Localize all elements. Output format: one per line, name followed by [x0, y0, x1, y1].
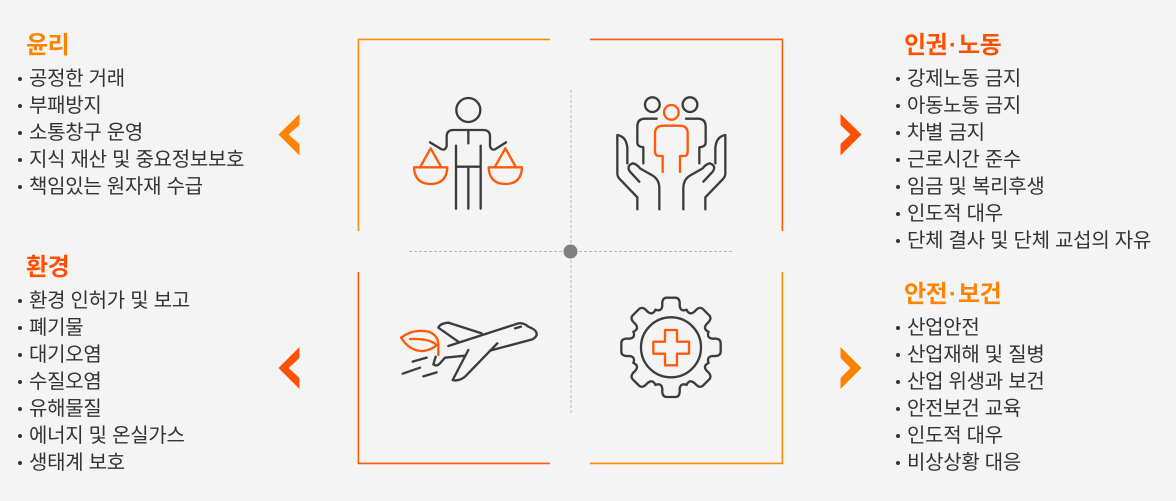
- list: environment: 수질오염: [29, 371, 102, 393]
- list: environment: 폐기물: [29, 317, 83, 339]
- heading: human rights and labor: 인권·노동: [904, 32, 1001, 59]
- heading: ethics: 윤리: [26, 32, 69, 59]
- frame corners: [358, 39, 782, 463]
- list: environment: 생태계 보호: [29, 452, 125, 474]
- list: human rights and labor: 근로시간 준수: [907, 149, 1021, 171]
- list: human rights and labor: 단체 결사 및 단체 교섭의 자유: [907, 230, 1151, 252]
- list: ethics: [18, 68, 244, 198]
- arrow: ethics: [278, 114, 300, 156]
- list: safety and health: 인도적 대우: [907, 425, 1003, 447]
- list: human rights and labor: 아동노동 금지: [907, 95, 1021, 117]
- list: ethics: 부패방지: [29, 95, 102, 117]
- arrow: environment: [278, 347, 300, 389]
- center crosshair: [409, 90, 732, 413]
- list: safety and health: 비상상황 대응: [907, 452, 1021, 474]
- list: environment: 대기오염: [29, 344, 102, 366]
- list: safety and health: 산업안전: [907, 317, 980, 339]
- list: human rights and labor: 강제노동 금지: [907, 68, 1021, 90]
- list: safety and health: 산업재해 및 질병: [907, 344, 1044, 366]
- icon: gear with medical cross: [621, 298, 721, 397]
- arrow: human rights and labor: [840, 114, 862, 156]
- heading: environment: 환경: [26, 254, 69, 281]
- list: safety and health: 안전보건 교육: [907, 398, 1021, 420]
- list: safety and health: 산업 위생과 보건: [907, 371, 1044, 393]
- list: human rights and labor: 임금 및 복리후생: [907, 176, 1044, 198]
- list: ethics: 지식 재산 및 중요정보보호: [29, 149, 244, 171]
- icon: person with scales: [414, 98, 522, 209]
- list: environment: 환경 인허가 및 보고: [29, 290, 190, 312]
- icon: people in hands: [617, 97, 725, 209]
- list: ethics: 책임있는 원자재 수급: [29, 176, 203, 198]
- list: human rights and labor: [896, 68, 1151, 252]
- list: human rights and labor: 인도적 대우: [907, 203, 1003, 225]
- heading: safety and health: 안전·보건: [904, 281, 1001, 308]
- list: ethics: 공정한 거래: [29, 68, 125, 90]
- list: environment: 에너지 및 온실가스: [29, 425, 185, 447]
- list: human rights and labor: 차별 금지: [907, 122, 985, 144]
- list: ethics: 소통창구 운영: [29, 122, 143, 144]
- icon: airplane with leaf: [401, 323, 537, 380]
- list: environment: 유해물질: [29, 398, 102, 420]
- list: safety and health: [896, 317, 1044, 474]
- arrow: safety and health: [840, 347, 862, 389]
- list: environment: [18, 290, 190, 474]
